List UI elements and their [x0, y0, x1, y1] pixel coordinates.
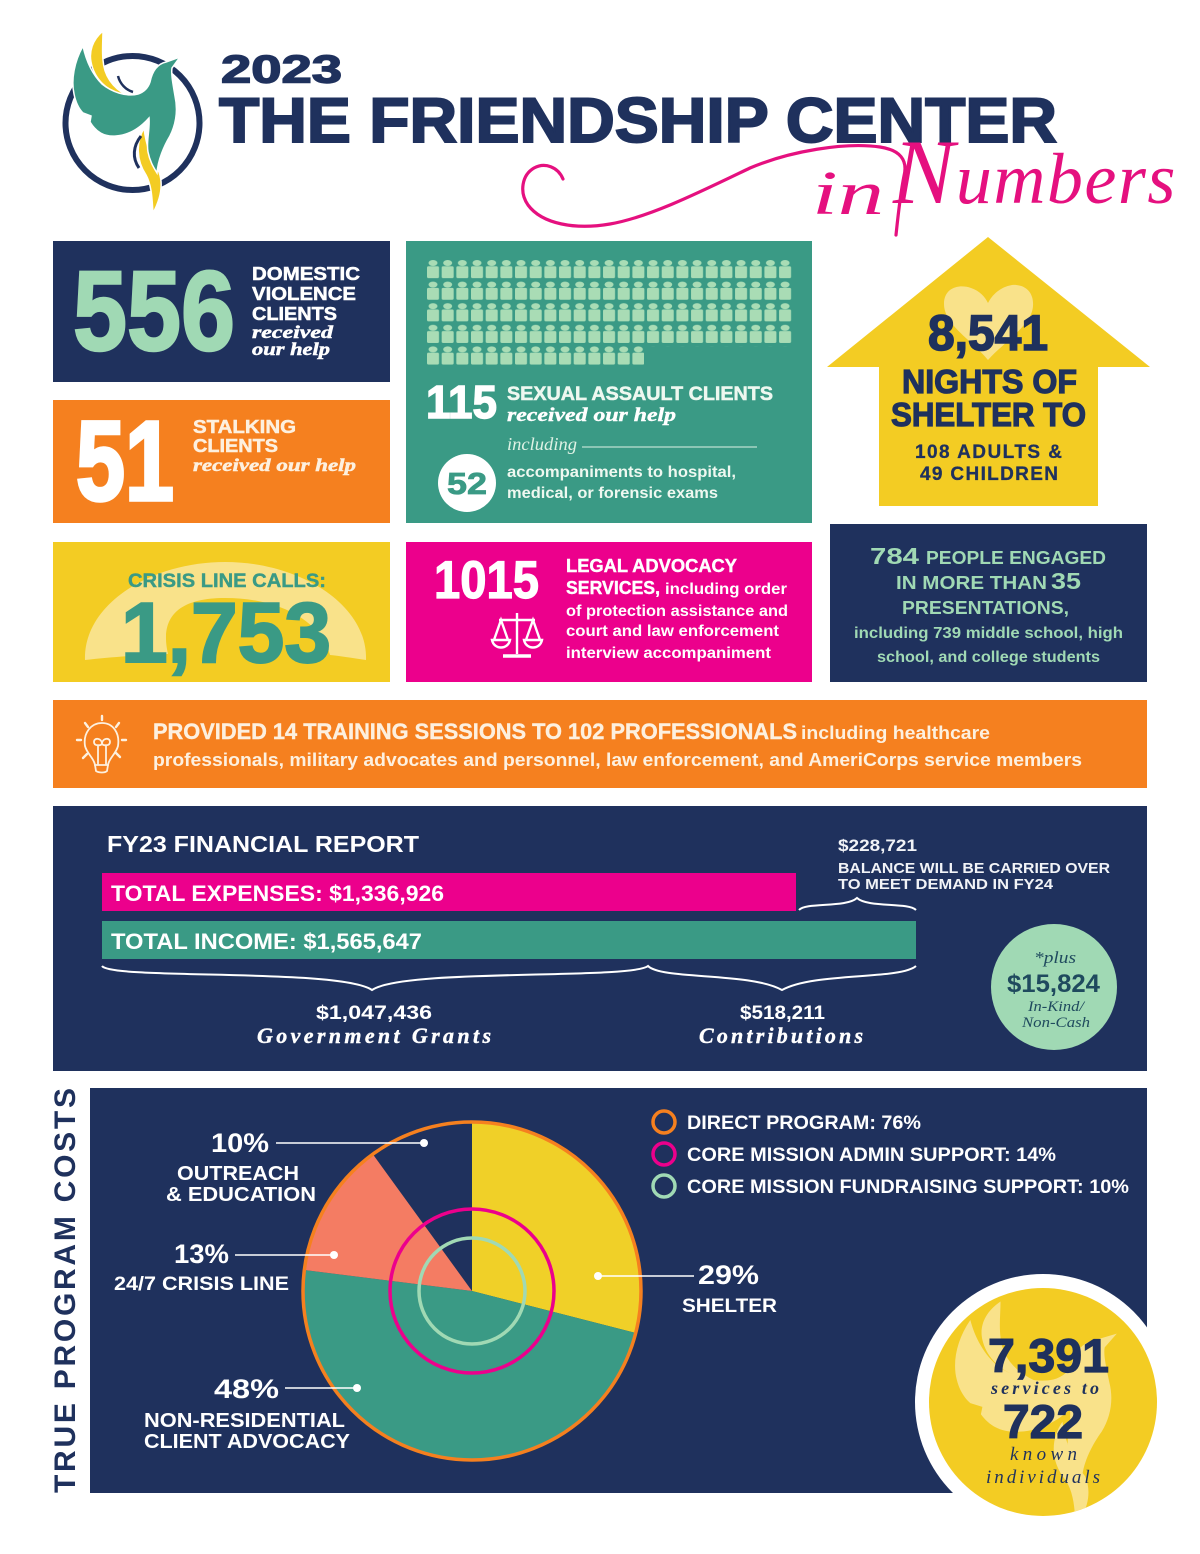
- callout: 48% advocacy: NON-RESIDENTIAL: [144, 1410, 345, 1432]
- government grants: $1,047,436: [316, 1003, 432, 1024]
- panel: stalking clients: [53, 398, 390, 524]
- adults and children: [915, 442, 1062, 485]
- icon: scales of justice: [492, 613, 542, 656]
- bar: total expenses: TOTAL EXPENSES: $1,336,926: [111, 881, 444, 906]
- callout: 29% shelter: [594, 1260, 777, 1317]
- training text: including healthcare: [801, 723, 990, 743]
- bar: total income: [102, 921, 916, 959]
- legal text: SERVICES,: [566, 578, 660, 598]
- callout: 13% crisis line: [114, 1239, 338, 1295]
- callout: 10% outreach: 10%: [211, 1128, 269, 1158]
- presentations text: including 739 middle school, high: [854, 625, 1123, 642]
- faded bird watermark: [955, 1301, 1117, 1527]
- panel: training banner: [53, 700, 1147, 788]
- callout: 10% outreach: & EDUCATION: [166, 1184, 316, 1206]
- legal text: LEGAL ADVOCACY: [566, 556, 737, 576]
- presentations text: 784: [870, 543, 919, 569]
- contributions: $518,211: [740, 1003, 825, 1024]
- services text: known: [1010, 1444, 1077, 1465]
- presentations text: IN MORE THAN: [896, 573, 1047, 593]
- callout: 48% advocacy: CLIENT ADVOCACY: [144, 1431, 351, 1453]
- presentations text: PRESENTATIONS,: [902, 598, 1069, 618]
- label: received our help: [193, 455, 356, 475]
- label: CLIENTS: [252, 303, 337, 324]
- services text: individuals: [986, 1467, 1100, 1488]
- nights heading: [891, 363, 1086, 433]
- callout: 48% advocacy: [144, 1374, 361, 1453]
- panel: crisis line calls: [53, 542, 390, 682]
- legend: [653, 1111, 1129, 1198]
- contributions: [699, 1003, 863, 1048]
- label: [252, 263, 360, 359]
- callout: 29% shelter: 29%: [698, 1260, 759, 1290]
- label: received: [252, 322, 334, 342]
- pie chart: [303, 1122, 641, 1460]
- accompaniments text: accompaniments to hospital,: [507, 464, 736, 481]
- presentations text: [854, 543, 1123, 666]
- pictogram of 115 people: [427, 260, 792, 365]
- services text: 7,391: [988, 1329, 1109, 1382]
- panel: presentations: [830, 524, 1147, 682]
- icon: telephone handset: [85, 562, 366, 660]
- label: CLIENTS: [193, 435, 278, 456]
- services text: services to: [990, 1378, 1099, 1398]
- government grants: Government Grants: [257, 1023, 491, 1048]
- callout: total services circle: [915, 1274, 1157, 1516]
- balance note: $228,721: [838, 836, 917, 855]
- training text: PROVIDED 14 TRAINING SESSIONS TO 102 PROFESSIONALS: [153, 719, 797, 744]
- financial heading: FY23 FINANCIAL REPORT: [107, 831, 419, 857]
- training text: [153, 719, 1082, 770]
- in-kind callout: In-Kind/: [1027, 999, 1086, 1015]
- including rule: including: [507, 434, 577, 454]
- label: DOMESTIC: [252, 263, 360, 284]
- legal text: including order: [665, 581, 787, 598]
- balance brace: [799, 898, 916, 910]
- balance note: TO MEET DEMAND IN FY24: [838, 876, 1054, 893]
- title year: 2023: [221, 48, 342, 92]
- stat 52 badge: [438, 454, 496, 512]
- stat 52 badge: 52: [447, 466, 487, 501]
- panel: sexual assault clients: [406, 241, 812, 523]
- in-kind callout: *plus: [1034, 948, 1076, 967]
- presentations text: 35: [1051, 568, 1081, 594]
- adults and children: 49 CHILDREN: [920, 464, 1058, 485]
- legal text: [566, 556, 788, 662]
- panel: shelter house: [827, 237, 1150, 506]
- callout: 29% shelter: SHELTER: [682, 1296, 777, 1317]
- stat 51: 51: [76, 398, 174, 524]
- bar: total expenses: [102, 873, 796, 911]
- script subtitle: in Numbers: [523, 121, 1177, 235]
- label: SEXUAL ASSAULT CLIENTS: [507, 384, 773, 405]
- accompaniments text: medical, or forensic exams: [507, 485, 718, 502]
- stat 1,753: 1,753: [121, 586, 331, 681]
- in-kind callout: $15,824: [1007, 970, 1100, 998]
- panel: FY23 financial report: [53, 806, 1147, 1071]
- contributions: Contributions: [699, 1023, 863, 1048]
- label: STALKING: [193, 416, 296, 437]
- presentations text: PEOPLE ENGAGED: [926, 548, 1106, 568]
- vertical heading: true program costs: TRUE PROGRAM COSTS: [49, 1088, 82, 1493]
- services text: [986, 1329, 1109, 1488]
- label: VIOLENCE: [252, 283, 356, 304]
- callout: 13% crisis line: 24/7 CRISIS LINE: [114, 1274, 289, 1295]
- logo: hummingbird in ring: [66, 31, 200, 213]
- nights heading: NIGHTS OF: [902, 363, 1077, 400]
- in-kind callout: Non-Cash: [1021, 1015, 1090, 1031]
- stat 8,541: 8,541: [928, 305, 1048, 361]
- swash: [523, 146, 905, 235]
- in-kind callout: [991, 924, 1117, 1050]
- legal text: of protection assistance and: [566, 603, 788, 620]
- callout: 48% advocacy: 48%: [214, 1374, 279, 1404]
- callout: 10% outreach: OUTREACH: [177, 1163, 299, 1185]
- panel: domestic violence clients: [53, 241, 390, 382]
- script words: in: [812, 160, 884, 228]
- legend: CORE MISSION FUNDRAISING SUPPORT: 10%: [687, 1177, 1129, 1198]
- balance note: [838, 836, 1110, 893]
- crisis label: CRISIS LINE CALLS:: [128, 570, 326, 592]
- title: [219, 48, 1057, 156]
- icon: light bulb: [77, 716, 126, 772]
- accompaniments text: [507, 464, 736, 502]
- income braces: [102, 966, 916, 990]
- stat 115: 115: [426, 376, 497, 428]
- callout: 13% crisis line: 13%: [174, 1239, 229, 1269]
- presentations text: school, and college students: [877, 649, 1100, 666]
- services text: 722: [1003, 1395, 1083, 1448]
- legal text: interview accompaniment: [566, 645, 772, 662]
- stat 556: 556: [73, 248, 235, 374]
- nights heading: SHELTER TO: [891, 396, 1086, 433]
- adults and children: 108 ADULTS &: [915, 442, 1062, 463]
- stat 1015: 1015: [434, 551, 539, 610]
- legend: DIRECT PROGRAM: 76%: [687, 1113, 921, 1134]
- bar: total income: TOTAL INCOME: $1,565,647: [111, 929, 422, 954]
- balance note: BALANCE WILL BE CARRIED OVER: [838, 860, 1110, 877]
- label: [193, 416, 356, 475]
- label: our help: [252, 339, 330, 359]
- sublabel: received our help: [507, 405, 676, 426]
- callout: 10% outreach: [166, 1128, 428, 1206]
- legend: CORE MISSION ADMIN SUPPORT: 14%: [687, 1145, 1056, 1166]
- panel: true program costs: [90, 1088, 1147, 1493]
- icon: heart: [944, 285, 1033, 360]
- panel: legal advocacy: [406, 542, 812, 682]
- government grants: [257, 1003, 491, 1048]
- legal text: court and law enforcement: [566, 623, 780, 640]
- training text: professionals, military advocates and personnel, law enforcement, and AmeriCorps service members: [153, 750, 1082, 770]
- script subtitle: in Numbers: Numbers: [892, 121, 1177, 223]
- title name: THE FRIENDSHIP CENTER: [219, 86, 1057, 156]
